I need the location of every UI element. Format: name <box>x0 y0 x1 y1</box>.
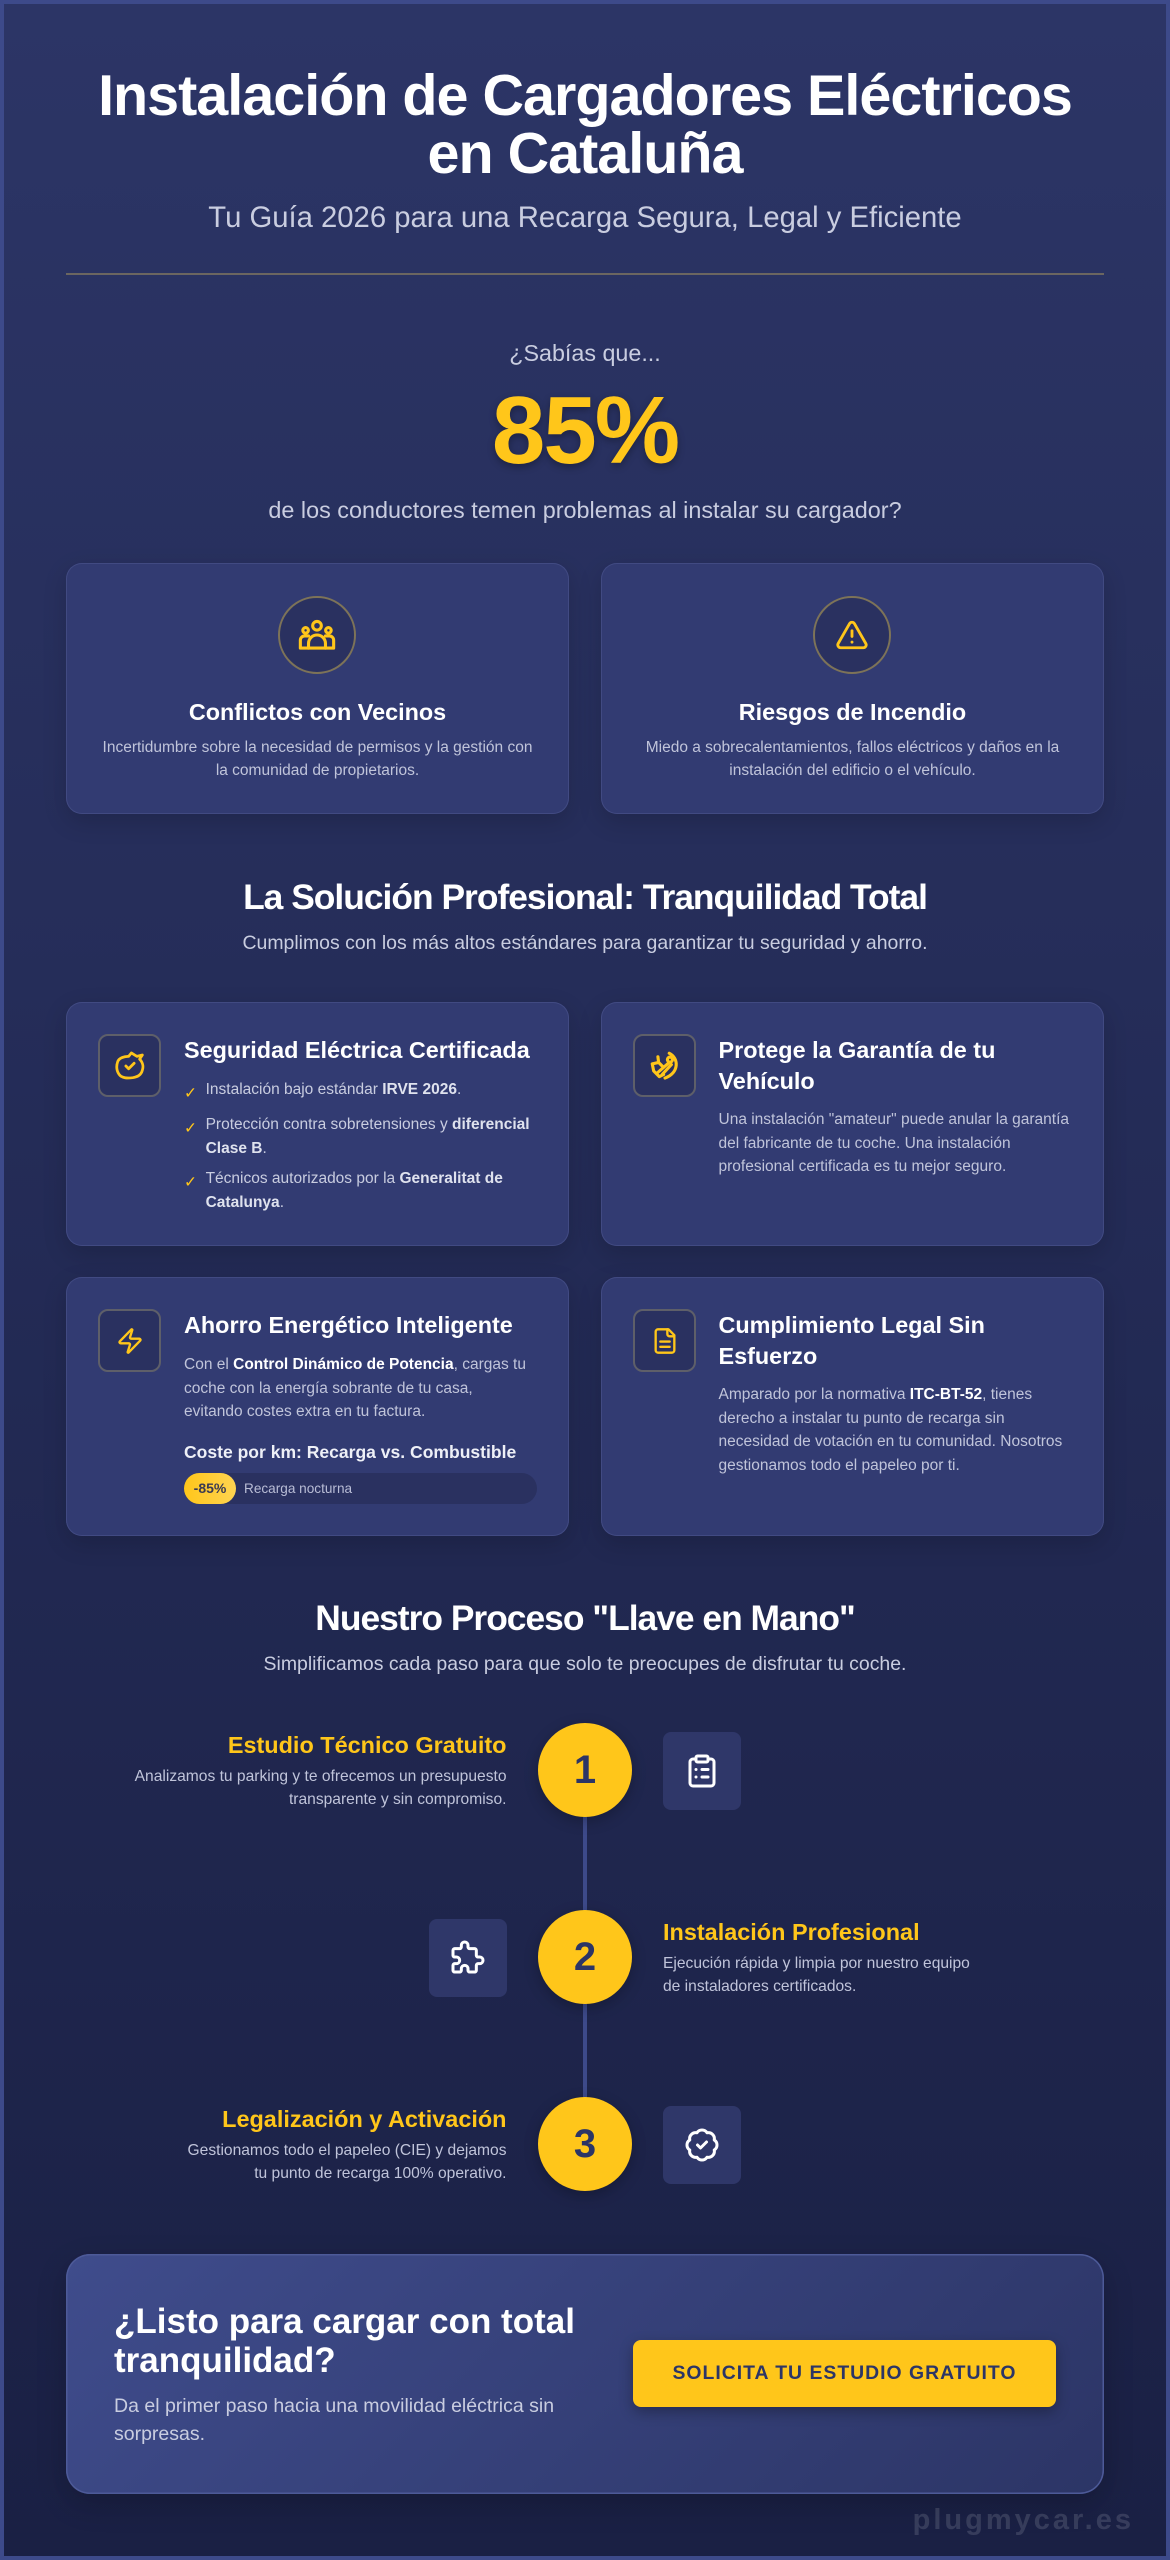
icon: document <box>633 1309 696 1372</box>
section subtitle: solución: Cumplimos con los más altos estándares para garantizar tu seguridad y ahorro. <box>242 932 927 954</box>
icon: lightning <box>98 1309 161 1372</box>
cta text: sorpresas. <box>114 2422 205 2444</box>
stat caption: de los conductores temen problemas al instalar su cargador? <box>268 496 902 522</box>
item 2 <box>206 1116 530 1156</box>
panel: call to action <box>66 2254 1104 2494</box>
text: necesidad de votación en tu comunidad. Nosotros <box>718 1433 1062 1450</box>
watermark: plugmycar.es <box>913 2504 1134 2536</box>
step 3 text: tu punto de recarga 100% operativo. <box>254 2165 506 2182</box>
check 2: ✓ <box>184 1118 197 1136</box>
item 2: Protección contra sobretensiones y diferencial <box>206 1116 530 1133</box>
icon: shield check <box>98 1034 161 1097</box>
text: Miedo a sobrecalentamientos, fallos eléctricos y daños en la <box>646 738 1059 756</box>
step 2 number <box>538 1910 632 2004</box>
heading: Esfuerzo <box>718 1343 817 1369</box>
text: Con el Control Dinámico de Potencia, cargas tu <box>184 1356 526 1373</box>
step 2 text <box>663 1954 970 1995</box>
text: del fabricante de tu coche. Una instalación <box>718 1134 1011 1152</box>
icon: clipboard <box>663 1732 741 1810</box>
step 1 heading: Estudio Técnico Gratuito <box>228 1732 506 1758</box>
bar chart: cost <box>184 1473 537 1504</box>
heading: Conflictos con Vecinos <box>189 698 446 724</box>
heading <box>718 1312 985 1369</box>
step 2 text: de instaladores certificados. <box>663 1978 856 1995</box>
panel: conflictos con vecinos <box>66 563 569 814</box>
heading: Riesgos de Incendio <box>739 698 966 724</box>
text: gestionamos todo el papeleo por ti. <box>718 1456 960 1474</box>
step 3 text <box>188 2142 506 2182</box>
item 3 <box>206 1170 503 1210</box>
bar value <box>184 1473 236 1504</box>
step 2 number: 2 <box>574 1935 596 1979</box>
panel: cumplimiento legal <box>601 1277 1104 1536</box>
subtitle: Tu Guía 2026 para una Recarga Segura, Legal y Eficiente <box>208 202 962 234</box>
title: en Cataluña <box>428 122 742 186</box>
heading: Ahorro Energético Inteligente <box>184 1312 513 1338</box>
heading <box>718 1036 995 1094</box>
step 1 text: transparente y sin compromiso. <box>289 1791 506 1808</box>
item 3: Catalunya. <box>206 1194 284 1210</box>
cta heading: ¿Listo para cargar con total <box>114 2302 575 2341</box>
section heading: solución: La Solución Profesional: Tranquilidad Total <box>243 877 927 917</box>
icon: people <box>278 596 356 674</box>
check 3: ✓ <box>184 1172 197 1190</box>
section subtitle: proceso: Simplificamos cada paso para que solo te preocupes de disfrutar tu coche. <box>264 1652 906 1674</box>
stat intro: ¿Sabías que... <box>509 340 661 366</box>
icon: warning triangle <box>813 596 891 674</box>
text: Una instalación "amateur" puede anular la garantía <box>718 1111 1069 1128</box>
step 1 <box>134 1723 741 1826</box>
step 1 text <box>134 1768 506 1808</box>
title <box>98 64 1072 186</box>
text <box>718 1111 1069 1175</box>
heading: Protege la Garantía de tu <box>718 1036 995 1062</box>
section heading: proceso: Nuestro Proceso "Llave en Mano" <box>315 1598 855 1638</box>
step 2 heading: Instalación Profesional <box>663 1919 920 1945</box>
heading: Seguridad Eléctrica Certificada <box>184 1036 530 1062</box>
text: profesional certificada es tu mejor seguro. <box>718 1158 1006 1175</box>
panel: seguridad eléctrica <box>66 1002 569 1246</box>
text <box>646 738 1060 779</box>
text <box>184 1356 526 1420</box>
step 1 number: 1 <box>574 1748 596 1792</box>
cta heading <box>114 2302 575 2380</box>
text <box>718 1386 1062 1474</box>
heading: Cumplimiento Legal Sin <box>718 1312 985 1338</box>
timeline connector <box>583 1770 587 2144</box>
icon: badge check <box>663 2106 741 2184</box>
step 2 text: Ejecución rápida y limpia por nuestro equipo <box>663 1954 970 1972</box>
cta button <box>633 2340 1056 2407</box>
step 3 number <box>538 2097 632 2191</box>
text: coche con la energía sobrante de tu casa, <box>184 1380 473 1396</box>
bar label: Recarga nocturna <box>244 1481 352 1496</box>
text: la comunidad de propietarios. <box>216 762 419 779</box>
icon: wrench seal <box>633 1034 696 1097</box>
step 3 heading: Legalización y Activación <box>222 2106 506 2132</box>
text: derecho a instalar tu punto de recarga sin <box>718 1410 1005 1426</box>
text: Amparado por la normativa ITC-BT-52, tienes <box>718 1386 1032 1403</box>
step 3 <box>188 2096 741 2196</box>
panel: riesgos de incendio <box>601 563 1104 814</box>
step 3 text: Gestionamos todo el papeleo (CIE) y dejamos <box>188 2142 506 2158</box>
text <box>103 738 532 779</box>
chart title: Coste por km: Recarga vs. Combustible <box>184 1442 516 1462</box>
icon: puzzle <box>429 1919 507 1997</box>
text: evitando costes extra en tu factura. <box>184 1403 425 1420</box>
panel: ahorro energético <box>66 1277 569 1536</box>
text: Incertidumbre sobre la necesidad de permisos y la gestión con <box>103 738 532 756</box>
step 2 <box>429 1910 970 2012</box>
step 1 number <box>538 1723 632 1817</box>
cta heading: tranquilidad? <box>114 2341 336 2380</box>
step 1 text: Analizamos tu parking y te ofrecemos un presupuesto <box>135 1768 506 1784</box>
item 3: Técnicos autorizados por la Generalitat de <box>206 1170 503 1187</box>
heading: Vehículo <box>718 1068 815 1094</box>
big stat 85%: 85% <box>492 377 678 484</box>
cta text: Da el primer paso hacia una movilidad eléctrica sin <box>114 2394 554 2416</box>
text: instalación del edificio o el vehículo. <box>729 762 976 779</box>
step 3 number: 3 <box>574 2122 596 2166</box>
check 1: ✓ <box>184 1084 197 1102</box>
panel: garantía <box>601 1002 1104 1246</box>
bar value: -85% <box>194 1480 226 1496</box>
cta button: SOLICITA TU ESTUDIO GRATUITO <box>672 2362 1016 2384</box>
item 1: Instalación bajo estándar IRVE 2026. <box>206 1081 461 1098</box>
title: Instalación de Cargadores Eléctricos <box>98 64 1072 128</box>
checklist <box>184 1081 530 1210</box>
item 2: Clase B. <box>206 1140 267 1156</box>
cta text <box>114 2394 554 2444</box>
